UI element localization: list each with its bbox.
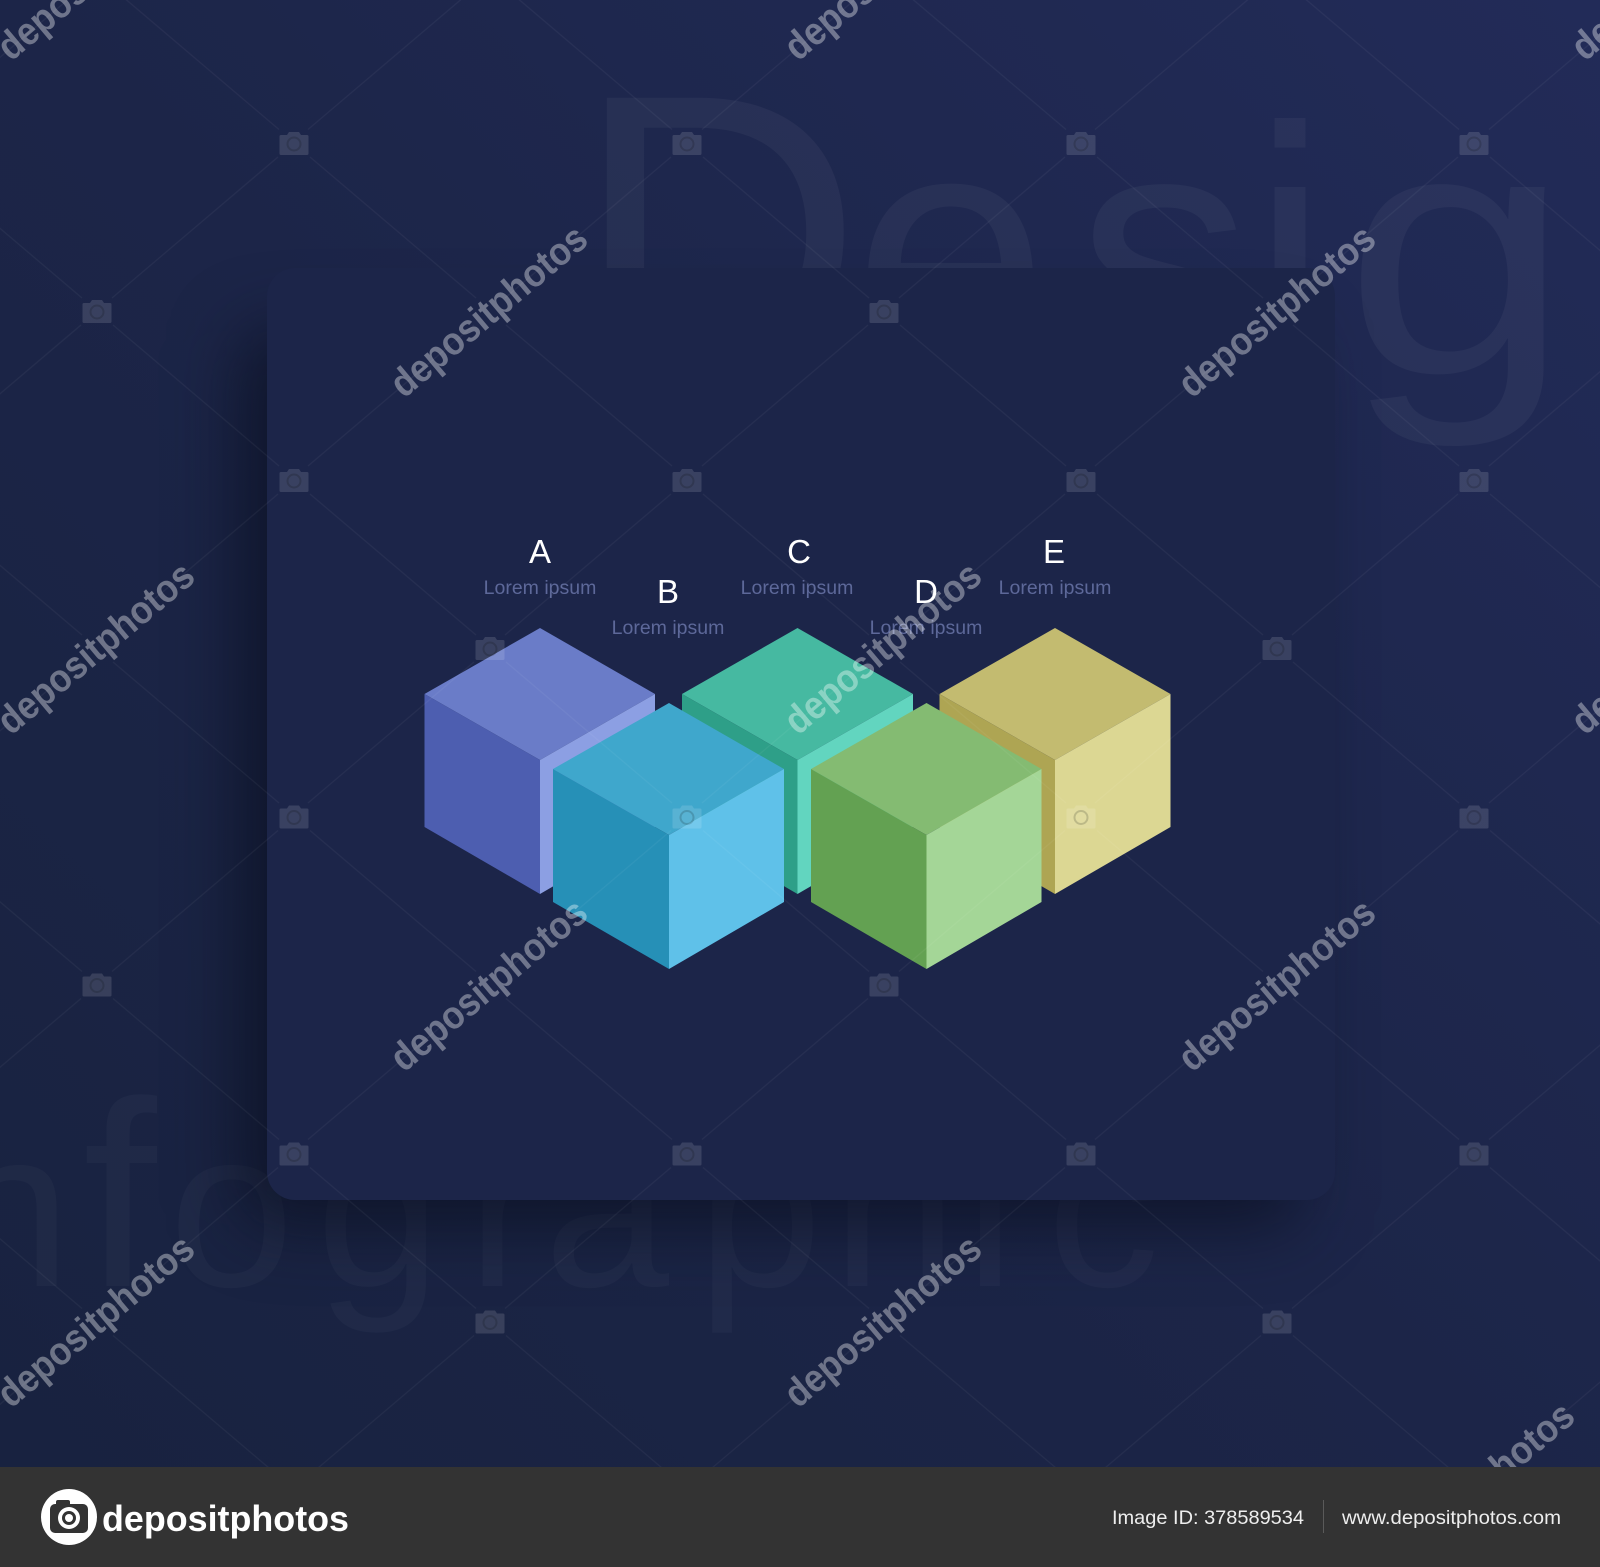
panel: card [267,268,1335,1200]
cube E [940,628,1170,894]
label D [870,573,982,639]
footer divider [1323,1500,1324,1533]
ghost title: Infographic: f [83,1047,158,1343]
ghost title: Design [574,11,1571,458]
cube A [424,628,655,894]
label C: C [787,533,811,570]
ghost title: Design: i [1251,54,1329,448]
watermark text: depositphotos [381,215,596,406]
watermark text: depositphotos [381,889,596,1080]
cube B [553,703,784,969]
watermark text: depositphotos [775,552,990,743]
watermark text: depositphotos [1169,889,1384,1080]
ghost title: Design: g [1344,54,1571,450]
footer logo mark [41,1489,97,1545]
footer image id: Image ID: 378589534 [1112,1507,1304,1529]
label C [741,533,853,599]
ghost title: Design: s [1076,54,1252,448]
label B: Lorem ipsum [612,617,724,639]
label A: Lorem ipsum [484,577,596,599]
ghost title: Infographic: ographic [169,1082,1160,1334]
label D: Lorem ipsum [870,617,982,639]
ghost title: Design: D [574,11,863,458]
label A [484,533,596,599]
watermark text: depositphotos [775,1225,990,1416]
watermark text: depositphotos [1169,215,1384,406]
label C: Lorem ipsum [741,577,853,599]
label E: Lorem ipsum [999,577,1111,599]
ghost title: Design: e [853,54,1049,448]
label A: A [529,533,551,570]
label E: E [1043,533,1065,570]
label B: B [657,573,679,610]
cube C [682,628,913,894]
label B [612,573,724,639]
label E [999,533,1111,599]
footer url: www.depositphotos.com [1341,1507,1561,1529]
cube D [811,703,1042,969]
footer logo wordmark: depositphotos [102,1498,349,1539]
label D: D [914,573,938,610]
card shadow [240,330,1300,1225]
footer bar [0,1467,1600,1567]
